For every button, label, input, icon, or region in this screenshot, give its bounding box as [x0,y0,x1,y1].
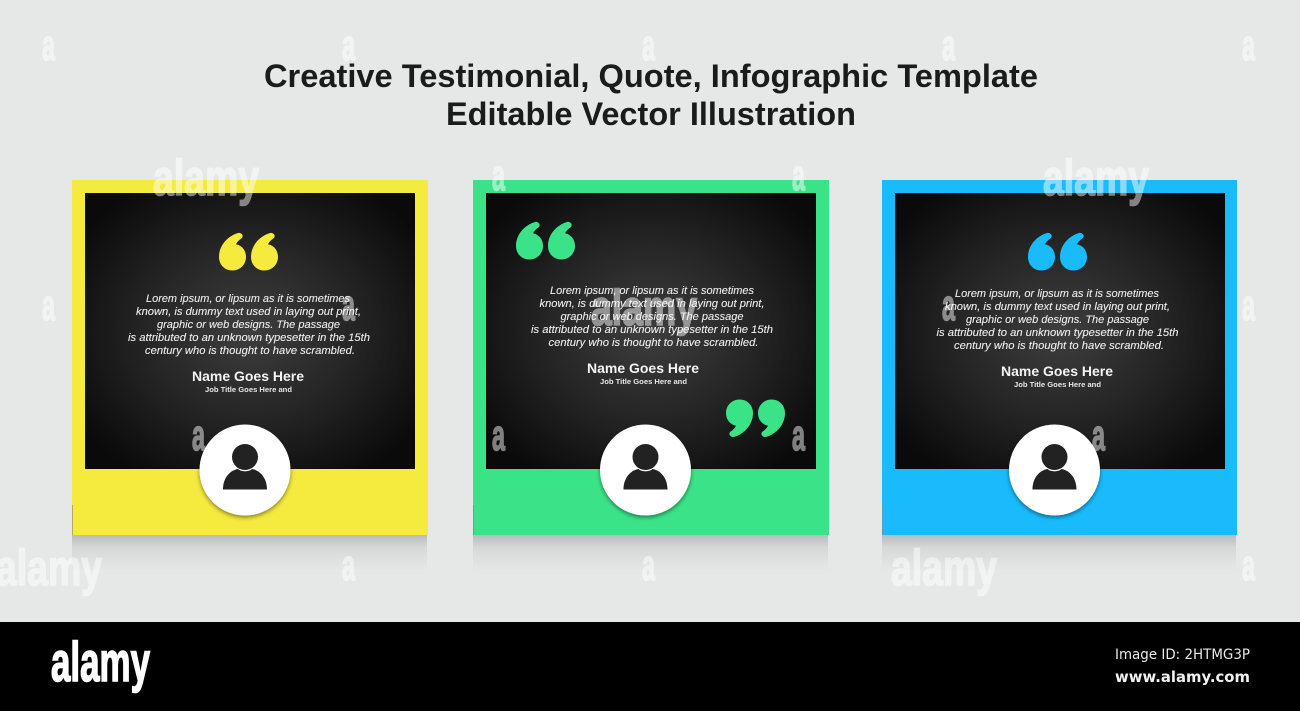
quote text: century who is thought to have scrambled. [145,345,355,357]
watermarks: a [792,151,805,200]
avatar [1009,424,1100,516]
quote text [531,285,773,349]
card shadow [72,535,427,571]
watermarks: alamy [0,540,102,596]
quote text: known, is dummy text used in laying out print, [945,301,1170,313]
quote text [128,293,370,357]
dark quote panel [85,193,415,469]
icon: opening quote mark [516,222,575,260]
title [264,58,1038,132]
name: Name Goes Here [587,360,699,376]
name: Name Goes Here [192,368,304,384]
quote text: Lorem ipsum, or lipsum as it is sometimes [146,293,350,305]
title: Editable Vector Illustration [446,96,856,132]
panel: green testimonial card [473,180,829,571]
watermarks: a [942,281,955,330]
quote text: Lorem ipsum, or lipsum as it is sometimes [550,285,754,297]
quote text: century who is thought to have scrambled. [954,340,1164,352]
quote text: graphic or web designs. The passage [966,314,1149,326]
name: Name Goes Here [1001,363,1113,379]
watermarks: a [1242,21,1255,70]
dark quote panel [895,193,1225,469]
watermarks: a [642,541,655,590]
job title: Job Title Goes Here and [205,385,292,394]
watermarks: a [642,21,655,70]
quote text: known, is dummy text used in laying out print, [136,306,361,318]
card shadow [473,535,828,571]
icon: closing quote mark [726,400,785,437]
quote text: is attributed to an unknown typesetter in the 15th [128,332,370,344]
footer bar [0,622,1300,711]
icon: opening quote mark [219,233,278,270]
watermarks: a [342,21,355,70]
quote text: graphic or web designs. The passage [560,311,744,323]
watermarks [0,21,1255,596]
watermarks: a [1242,541,1255,590]
card shadow [882,535,1236,571]
avatar [600,424,691,516]
watermarks: a [492,411,505,460]
quote text: Lorem ipsum, or lipsum as it is sometimes [955,288,1159,300]
watermarks: a [192,411,205,460]
watermarks: alamy [591,280,697,336]
left edge line [473,505,474,535]
job title: Job Title Goes Here and [600,377,687,386]
watermarks: a [42,281,55,330]
left edge line [882,505,883,535]
watermarks: a [342,541,355,590]
panel: yellow testimonial card [72,180,428,571]
quote text: graphic or web designs. The passage [157,319,340,331]
watermarks: a [1092,411,1105,460]
watermarks: a [492,151,505,200]
footer logo: alamy [51,630,150,693]
image id: Image ID: 2HTMG3P [1115,647,1250,663]
green frame [473,180,829,535]
quote text: known, is dummy text used in laying out print, [540,298,764,310]
watermarks: a [792,411,805,460]
title: Creative Testimonial, Quote, Infographic Template [264,58,1038,94]
quote text [936,288,1178,352]
watermarks: a [342,281,355,330]
quote text: century who is thought to have scrambled. [548,337,758,349]
website: www.alamy.com [1115,668,1250,686]
watermarks: alamy [1043,150,1149,206]
avatar [200,424,290,516]
watermarks: a [42,21,55,70]
left edge line [72,505,73,535]
blue frame [882,180,1237,535]
watermarks: alamy [891,540,997,596]
quote text: is attributed to an unknown typesetter in the 15th [531,324,773,336]
watermarks: a [942,21,955,70]
quote text: is attributed to an unknown typesetter in the 15th [936,327,1178,339]
icon: opening quote mark [1028,233,1087,270]
watermarks: a [1242,281,1255,330]
watermarks: alamy [153,150,259,206]
job title: Job Title Goes Here and [1014,380,1101,389]
panel: blue testimonial card [882,180,1237,571]
dark quote panel [486,193,816,469]
yellow frame [72,180,428,535]
